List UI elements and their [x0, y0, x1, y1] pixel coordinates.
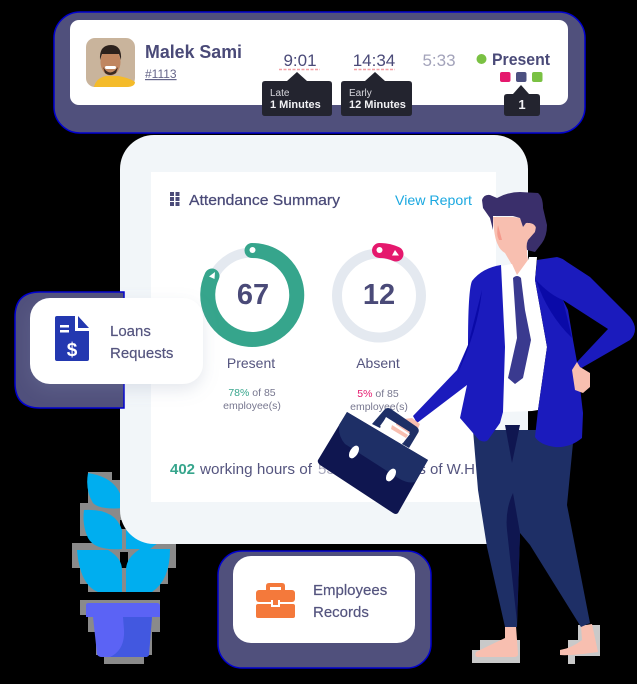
- link: view report: View Report: [395, 192, 472, 208]
- label: absent: Absent: [356, 355, 400, 371]
- card: employees halo: [218, 551, 431, 668]
- card: loans requests: [30, 298, 203, 384]
- chart: absent donut: 12: [363, 279, 395, 311]
- trousers: [473, 430, 590, 627]
- hair: [482, 192, 547, 252]
- card: loans halo: [15, 292, 124, 408]
- panel: attendance summary: [151, 172, 496, 502]
- avatar: [86, 38, 135, 87]
- card: employee attendance: [70, 20, 568, 116]
- stat: absent percent: employee(s): [350, 401, 408, 413]
- tooltip: count: 1: [518, 97, 526, 112]
- briefcase: [318, 408, 428, 514]
- working hours line: hours of W.H: [388, 461, 475, 478]
- stat: absent percent: 5% of 85: [357, 388, 399, 400]
- illustration: businessman: [318, 192, 635, 664]
- status: present: Present: [492, 51, 550, 69]
- card: employee attendance halo: [54, 12, 585, 133]
- panel: attendance summary backdrop: [120, 135, 528, 544]
- chart: present donut: 67: [237, 279, 269, 311]
- label: Employees: [313, 582, 387, 599]
- foot halos: [472, 640, 520, 663]
- icon: drag handle: [170, 192, 180, 206]
- tooltip: late: 1 Minutes: [270, 99, 321, 111]
- icon: orange briefcase: [256, 583, 295, 618]
- stat: present percent: 78% of 85: [228, 387, 276, 399]
- label: [110, 323, 173, 362]
- feet: [475, 626, 518, 657]
- right jacket and arm: [535, 257, 635, 447]
- left hand: [396, 418, 420, 443]
- card: employees records: [233, 556, 415, 643]
- working hours line: working hours of: [199, 461, 313, 478]
- tooltip: count: [504, 85, 540, 116]
- icon: loan document: [55, 316, 89, 361]
- right hand: [572, 362, 590, 393]
- shirt: [501, 257, 547, 412]
- time: check in: 9:01: [283, 51, 317, 70]
- stat: present percent: [223, 387, 281, 412]
- label: present: Present: [227, 355, 275, 371]
- status swatches: [500, 72, 542, 82]
- working hours line: 402: [170, 461, 195, 478]
- tooltip: late: Late: [270, 88, 290, 99]
- tie: [508, 276, 531, 384]
- label: [313, 582, 387, 621]
- stat: absent percent: [350, 388, 408, 413]
- chart: present donut: [208, 247, 297, 339]
- tooltip: early: 12 Minutes: [349, 99, 406, 111]
- left jacket and arm: [413, 265, 505, 442]
- label: Records: [313, 604, 369, 621]
- heading: Attendance Summary: [189, 192, 341, 209]
- icon: potted plant: [72, 472, 176, 664]
- icon: loan document: $: [67, 340, 78, 361]
- neck and face: [493, 217, 536, 276]
- label: Loans: [110, 323, 151, 340]
- total time: 5:33: [422, 51, 456, 70]
- tooltip: late: [262, 72, 332, 116]
- stat: present percent: employee(s): [223, 400, 281, 412]
- working hours line: 530: [318, 461, 343, 478]
- name: Malek Sami: [145, 42, 242, 62]
- tooltip: early: [341, 72, 412, 116]
- label: Requests: [110, 345, 173, 362]
- working hours line: [170, 461, 475, 478]
- chart: absent donut: [337, 247, 421, 338]
- time: check out: 14:34: [353, 51, 395, 70]
- tooltip: early: Early: [349, 88, 372, 99]
- employee id: #1113: [145, 67, 177, 81]
